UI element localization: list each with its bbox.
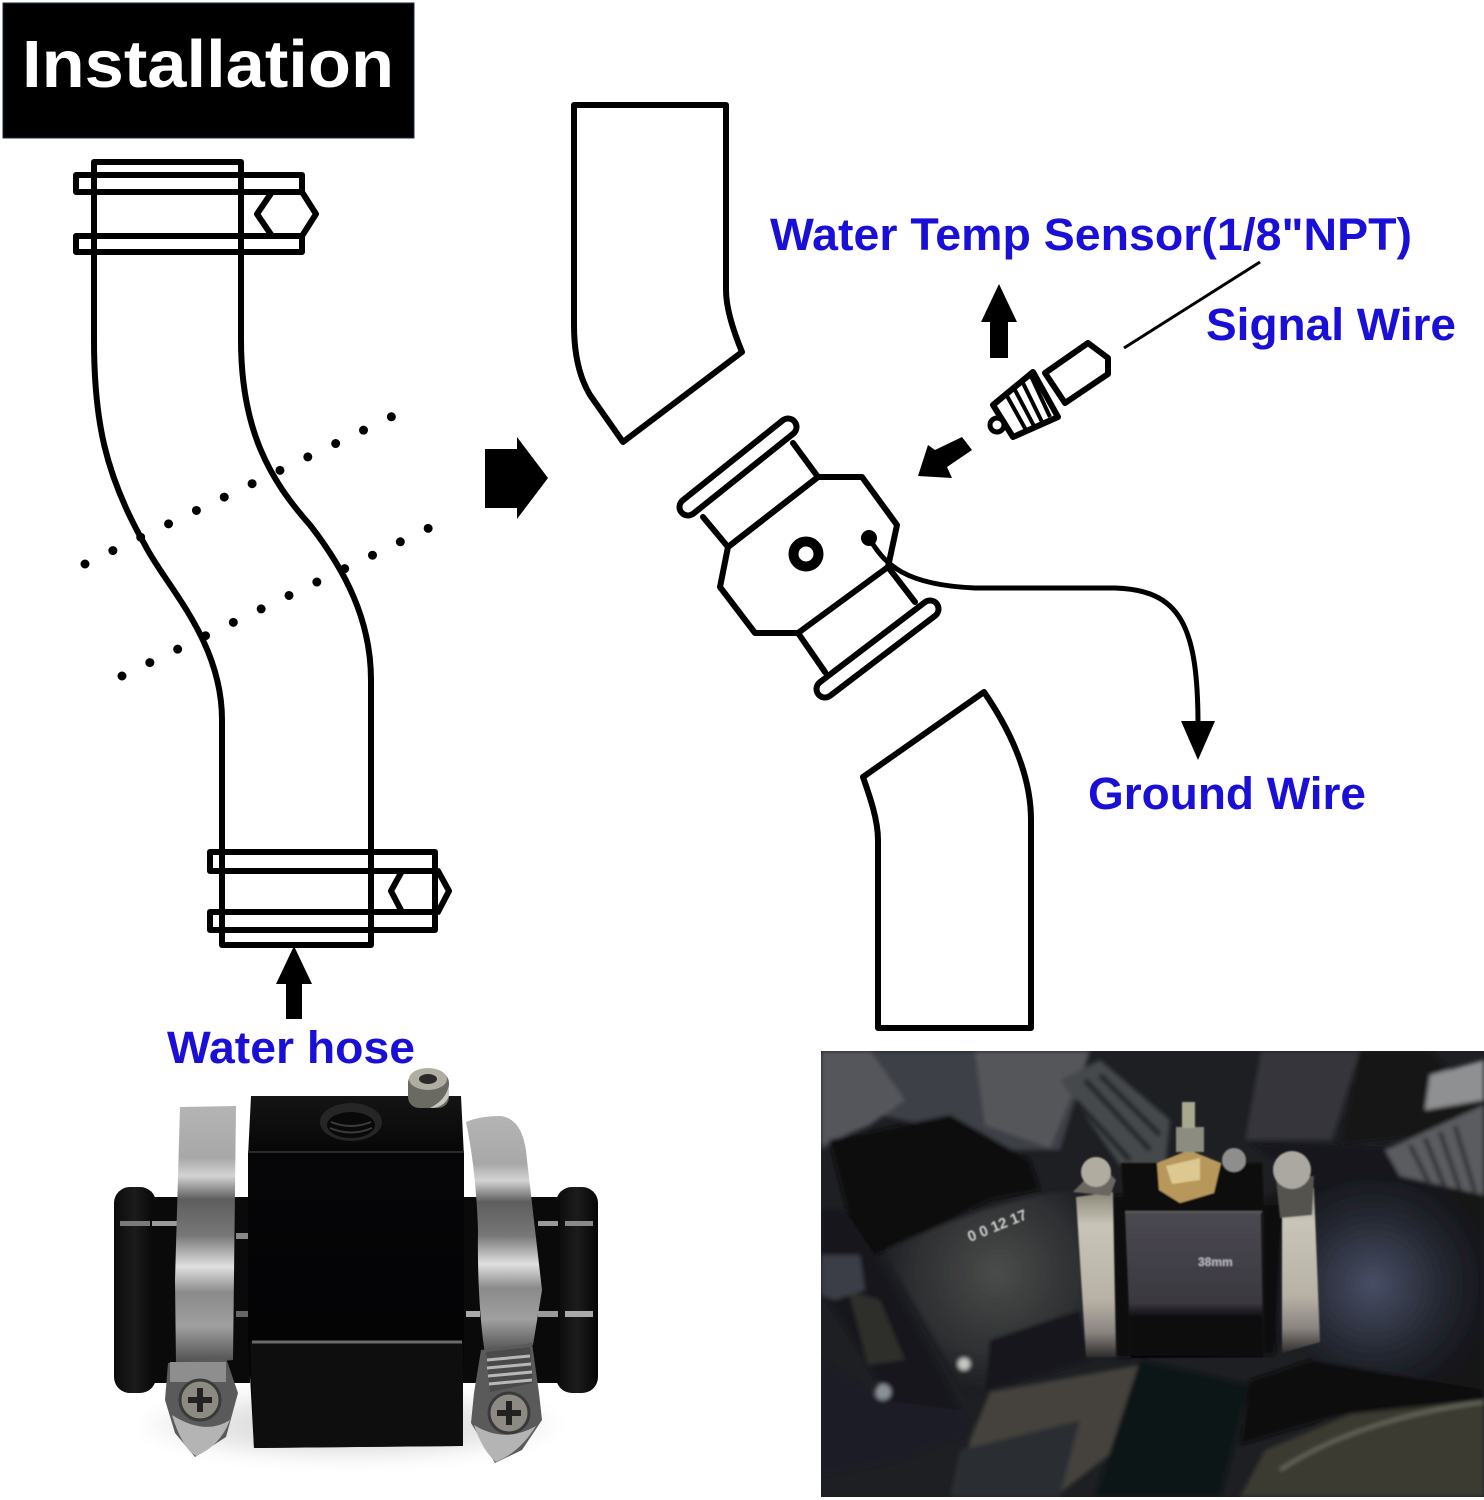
lower centre block bbox=[960, 1365, 1140, 1497]
title: Installation: Installation bbox=[22, 27, 394, 102]
lower right hose bbox=[1240, 1395, 1484, 1497]
lower neck bbox=[798, 567, 915, 672]
diagram: upper hose section bbox=[574, 105, 742, 442]
arrow: up to hose bbox=[276, 946, 312, 1019]
diagram: hose with clamps bbox=[76, 162, 449, 945]
label: water hose: Water hose bbox=[167, 1022, 415, 1073]
black strip under clamps bbox=[1113, 1194, 1131, 1360]
arrow: right to exploded view bbox=[485, 437, 548, 519]
photo: installed adapter in engine bay bbox=[821, 1051, 1484, 1497]
sensor hole bbox=[861, 530, 877, 546]
photo: installed adapter in engine bay: 0 0 12 17 bbox=[965, 1207, 1030, 1246]
title: Installation bbox=[3, 3, 414, 138]
adapter plate bbox=[1125, 1213, 1263, 1358]
body bbox=[248, 1096, 464, 1448]
bottom clamp bbox=[210, 852, 449, 930]
dark tie bbox=[1095, 1360, 1250, 1497]
left clamp bbox=[175, 1106, 236, 1365]
brass fitting bbox=[1157, 1150, 1221, 1203]
dark ribbed hose right bbox=[1256, 1141, 1420, 1185]
label: water temp sensor: Water Temp Sensor(1/8"NPT) bbox=[770, 209, 1412, 260]
left clamp bbox=[1076, 1192, 1116, 1357]
lower flange bbox=[825, 609, 930, 689]
centre port bbox=[794, 542, 818, 566]
top flange bbox=[688, 427, 788, 507]
diagram: adapter bbox=[688, 427, 930, 689]
right hose bbox=[1262, 1178, 1484, 1400]
right screw housing bbox=[471, 1343, 542, 1463]
sensor tip bbox=[990, 418, 1004, 432]
lower left hose bbox=[872, 1394, 960, 1451]
ground wire with arrow bbox=[869, 538, 1215, 760]
hose outline bbox=[94, 162, 371, 945]
left spigot bbox=[114, 1187, 250, 1393]
adapter top bbox=[1121, 1163, 1264, 1213]
photo: adapter product bbox=[114, 1068, 598, 1463]
diagram: lower hose section bbox=[863, 692, 1031, 1028]
small set screw bbox=[408, 1068, 449, 1108]
top neck bbox=[703, 443, 818, 547]
corrugated hose top bbox=[1060, 1060, 1170, 1170]
label: signal wire: Signal Wire bbox=[1206, 299, 1456, 350]
icon: sensor bbox=[990, 343, 1108, 437]
top clamp bbox=[76, 175, 316, 252]
arrow: sensor up bbox=[981, 284, 1017, 358]
dark cavity bbox=[829, 1115, 1040, 1260]
main hose left bbox=[884, 1190, 1090, 1397]
right dark gap bbox=[1340, 1051, 1484, 1145]
right spigot bbox=[460, 1187, 598, 1393]
vertical pipe bbox=[1245, 1051, 1360, 1140]
dotted cut line lower bbox=[122, 527, 431, 676]
background engine parts bbox=[821, 1051, 1090, 1150]
dotted cut line upper bbox=[85, 416, 393, 564]
corrugated hose right bbox=[1385, 1105, 1484, 1195]
threaded port bbox=[320, 1103, 382, 1141]
sensor thread bbox=[993, 372, 1058, 437]
left screw housing bbox=[165, 1358, 238, 1457]
label: ground wire: Ground Wire bbox=[1088, 768, 1366, 819]
arrow: sensor into adapter bbox=[918, 437, 972, 478]
left collar bbox=[822, 1206, 958, 1410]
right clamp bbox=[1282, 1188, 1320, 1353]
octagon body bbox=[720, 477, 897, 633]
sensor cylinder bbox=[1045, 343, 1108, 403]
line: signal wire leader bbox=[1124, 262, 1260, 348]
connector top right bbox=[1425, 1060, 1484, 1110]
right clamp bbox=[466, 1116, 542, 1355]
photo: installed adapter in engine bay: 38mm bbox=[1198, 1255, 1233, 1269]
